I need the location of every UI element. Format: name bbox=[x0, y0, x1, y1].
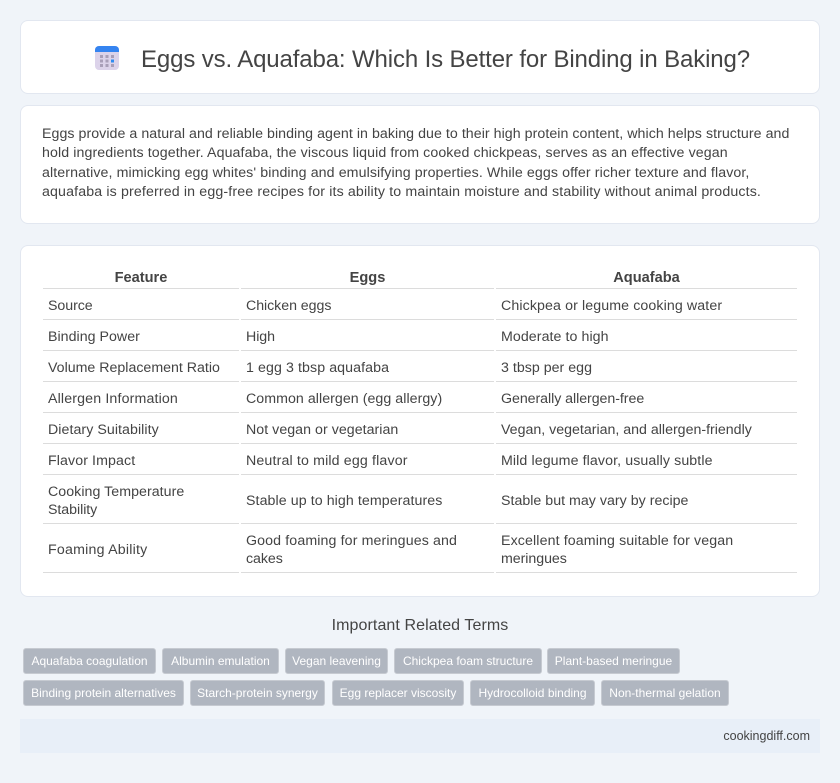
tag bbox=[23, 648, 156, 674]
row: dietary suitability: Vegan, vegetarian, and allergen-friendly bbox=[501, 422, 752, 438]
row: source bbox=[48, 298, 722, 314]
row: cooking temperature stability: Cooking Temperature bbox=[48, 484, 184, 500]
table header: Aquafaba bbox=[613, 270, 680, 286]
row: dietary suitability bbox=[48, 422, 752, 438]
row: source: Chicken eggs bbox=[246, 298, 331, 314]
intro text: hold ingredients together. Aquafaba, the viscous liquid from cooked chickpeas, serves as an effective vegan bbox=[42, 145, 728, 161]
tag: Starch-protein synergy bbox=[197, 686, 318, 700]
row: volume replacement ratio: 1 egg 3 tbsp aquafaba bbox=[246, 360, 389, 376]
row: flavor impact: Neutral to mild egg flavor bbox=[246, 453, 408, 469]
intro text: aquafaba is preferred in egg-free recipes for its ability to maintain moisture and stability without animal products. bbox=[42, 184, 761, 200]
row: cooking temperature stability bbox=[48, 484, 688, 518]
row: flavor impact: Mild legume flavor, usually subtle bbox=[501, 453, 713, 469]
tag: Aquafaba coagulation bbox=[31, 654, 148, 668]
intro text bbox=[42, 126, 789, 200]
table header: Eggs bbox=[350, 270, 385, 286]
panel: header bbox=[20, 20, 820, 94]
row: flavor impact bbox=[48, 453, 713, 469]
table header: Feature bbox=[115, 270, 167, 286]
panel: intro bbox=[20, 105, 820, 224]
comparison table bbox=[43, 270, 797, 573]
footer bar bbox=[20, 719, 820, 753]
tag bbox=[601, 680, 729, 706]
row: volume replacement ratio: 3 tbsp per egg bbox=[501, 360, 592, 376]
row: source: Source bbox=[48, 298, 93, 314]
row: cooking temperature stability: Stable but may vary by recipe bbox=[501, 493, 688, 509]
intro text: alternative, mimicking egg whites' binding and emulsifying properties. While eggs offer richer texture and flavor, bbox=[42, 165, 749, 181]
row: flavor impact: Flavor Impact bbox=[48, 453, 135, 469]
tag: Albumin emulation bbox=[171, 654, 270, 668]
row: volume replacement ratio: Volume Replacement Ratio bbox=[48, 360, 220, 376]
row: cooking temperature stability: Stable up to high temperatures bbox=[246, 493, 442, 509]
footer text: cookingdiff.com bbox=[723, 729, 810, 743]
row: foaming ability bbox=[48, 533, 733, 567]
row: allergen information: Generally allergen-free bbox=[501, 391, 644, 407]
row: allergen information: Common allergen (egg allergy) bbox=[246, 391, 442, 407]
row: foaming ability: Foaming Ability bbox=[48, 542, 148, 558]
row: foaming ability: Good foaming for meringues and bbox=[246, 533, 457, 549]
row: allergen information bbox=[48, 391, 644, 407]
row: dietary suitability: Not vegan or vegetarian bbox=[246, 422, 398, 438]
table header bbox=[115, 270, 680, 286]
row: volume replacement ratio bbox=[48, 360, 592, 376]
tag bbox=[547, 648, 680, 674]
tag: Binding protein alternatives bbox=[31, 686, 176, 700]
tags: related terms bbox=[23, 648, 729, 706]
row: foaming ability: Excellent foaming suitable for vegan bbox=[501, 533, 733, 549]
tag bbox=[23, 680, 184, 706]
row: cooking temperature stability: Stability bbox=[48, 502, 97, 518]
tag: Vegan leavening bbox=[292, 654, 381, 668]
tag bbox=[470, 680, 595, 706]
row: binding power: Binding Power bbox=[48, 329, 140, 345]
row: foaming ability: cakes bbox=[246, 551, 283, 567]
row: binding power bbox=[48, 329, 609, 345]
tag bbox=[332, 680, 464, 706]
intro text: Eggs provide a natural and reliable binding agent in baking due to their high protein content, which helps structure and bbox=[42, 126, 789, 142]
tag: Chickpea foam structure bbox=[403, 654, 533, 668]
tag: Hydrocolloid binding bbox=[478, 686, 587, 700]
row: binding power: High bbox=[246, 329, 275, 345]
tag bbox=[190, 680, 325, 706]
tag bbox=[285, 648, 388, 674]
row: foaming ability: meringues bbox=[501, 551, 567, 567]
tag: Non-thermal gelation bbox=[609, 686, 721, 700]
row: source: Chickpea or legume cooking water bbox=[501, 298, 722, 314]
tag bbox=[162, 648, 279, 674]
tag: Plant-based meringue bbox=[555, 654, 672, 668]
title: Eggs vs. Aquafaba: Which Is Better for Binding in Baking? bbox=[141, 46, 750, 73]
row: binding power: Moderate to high bbox=[501, 329, 609, 345]
panel: comparison table bbox=[20, 245, 820, 597]
icon: calendar bbox=[95, 46, 119, 70]
tag: Egg replacer viscosity bbox=[340, 686, 456, 700]
tag bbox=[394, 648, 542, 674]
heading: important related terms: Important Related Terms bbox=[332, 617, 508, 634]
row: allergen information: Allergen Information bbox=[48, 391, 178, 407]
row: dietary suitability: Dietary Suitability bbox=[48, 422, 159, 438]
